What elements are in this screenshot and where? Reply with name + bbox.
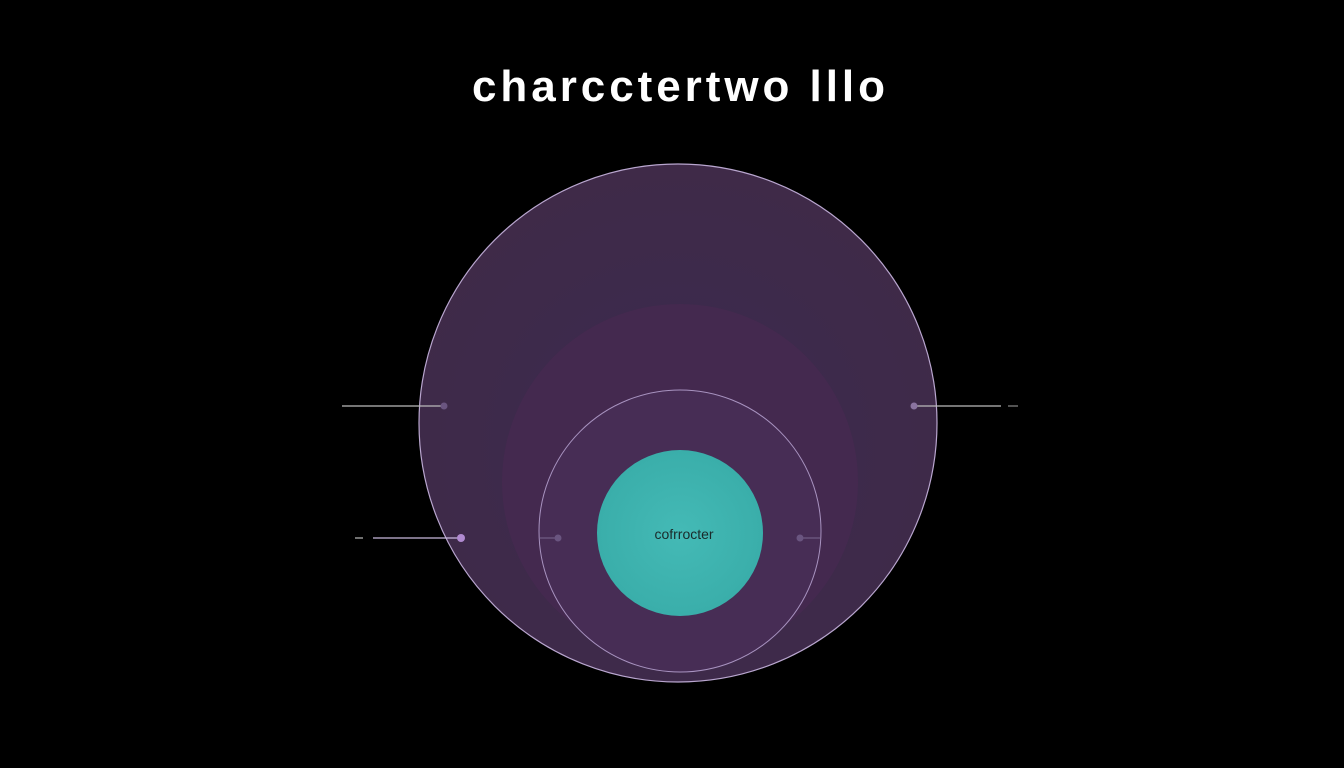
core label: cofrrocter <box>654 526 714 542</box>
middle circle <box>502 304 858 660</box>
connector: left upper <box>342 402 448 410</box>
teal core circle <box>597 450 763 616</box>
connector: left lower <box>355 534 465 542</box>
title: charcctertwo lllo <box>472 62 885 111</box>
connector: right upper <box>910 402 1018 410</box>
ring markers <box>540 534 820 542</box>
inner ring <box>539 390 821 672</box>
outer circle <box>419 164 937 682</box>
